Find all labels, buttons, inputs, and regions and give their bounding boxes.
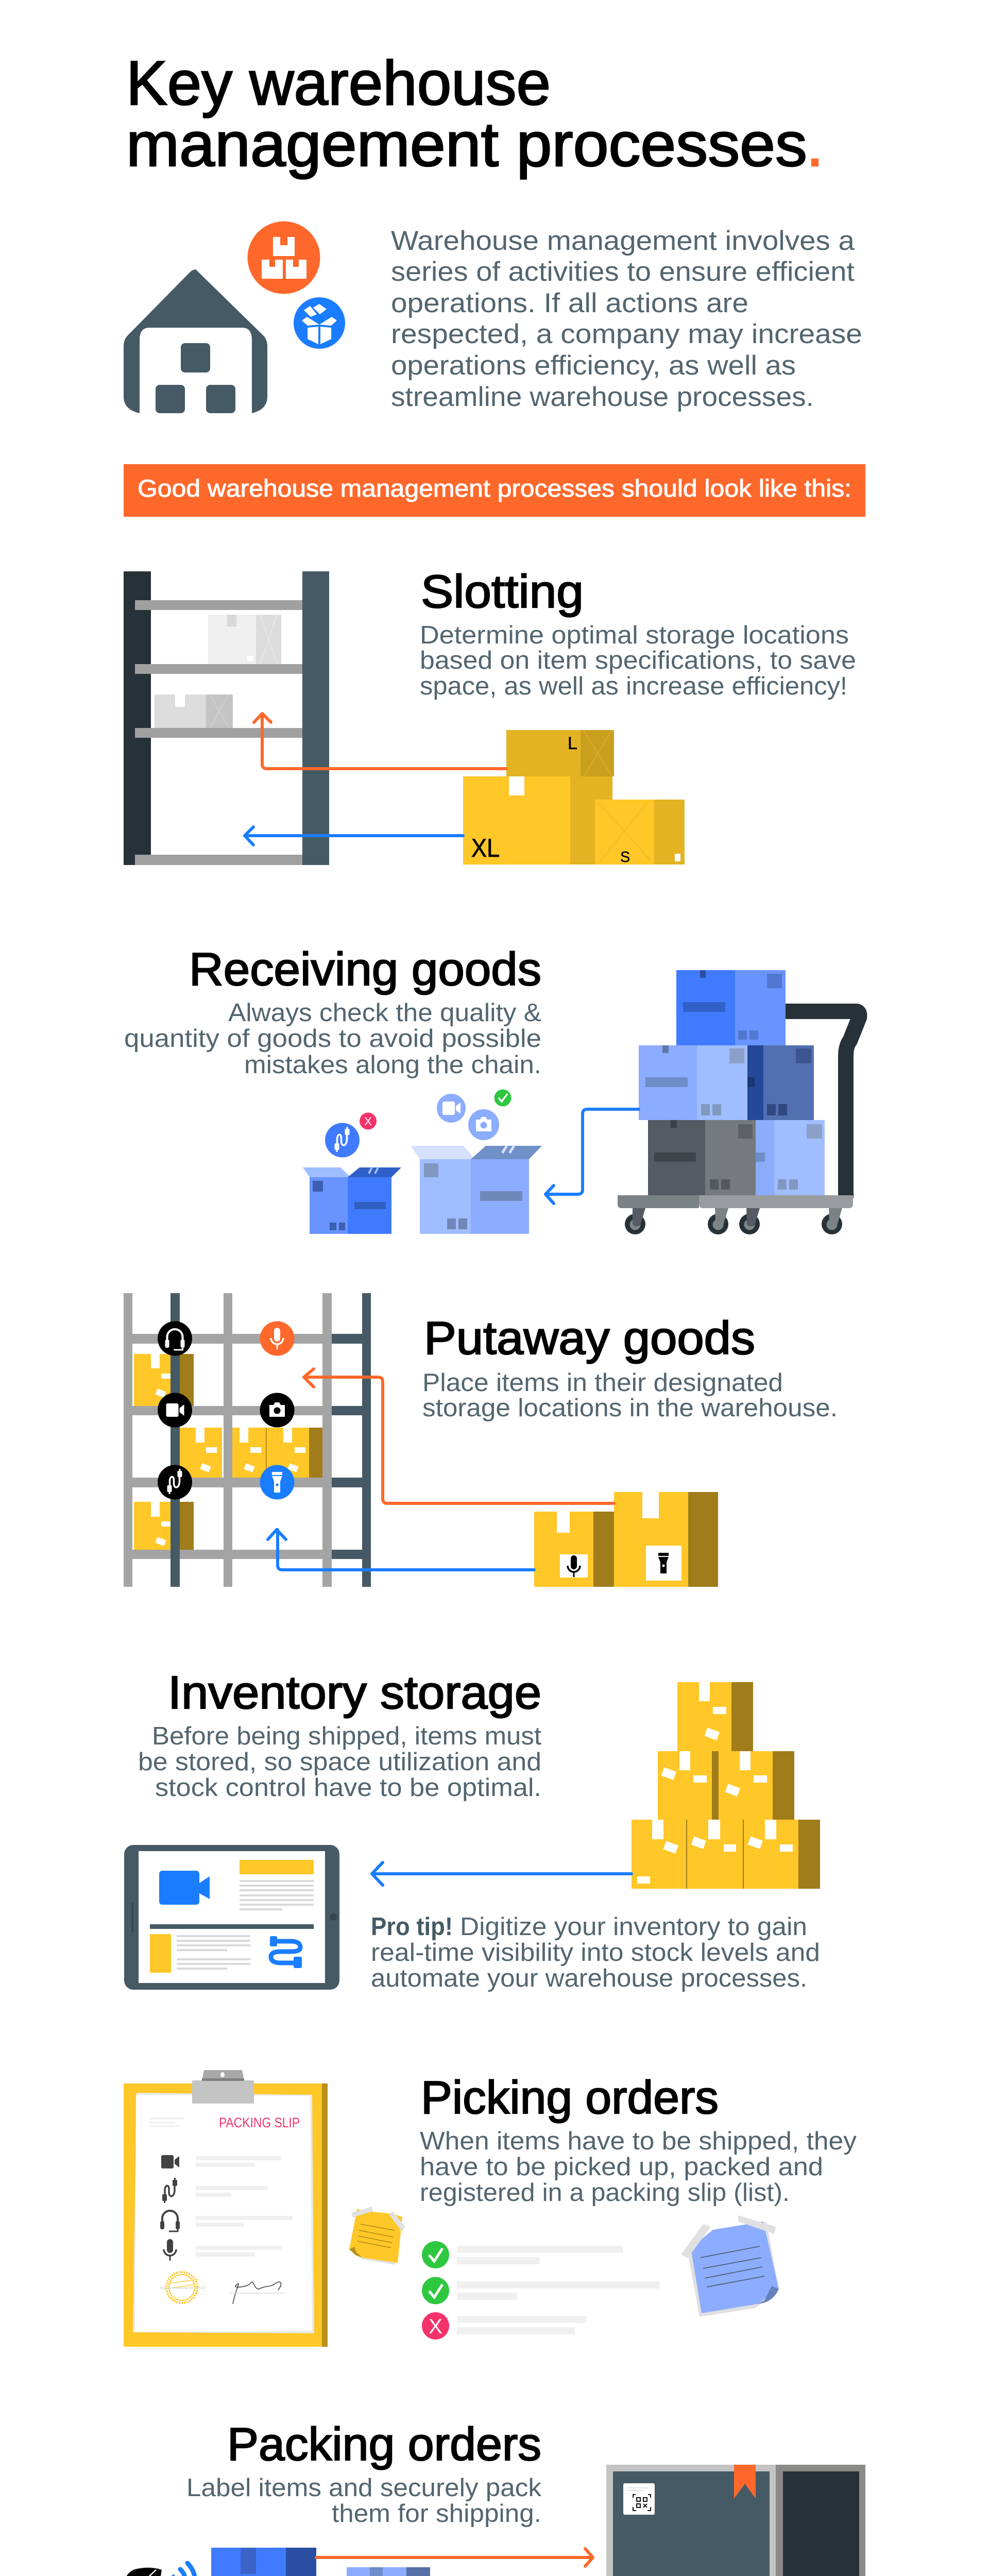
clipboard with packing slip: [124, 2070, 328, 2347]
list row: approved 1: [422, 2241, 623, 2268]
panel: packing orders: [126, 2419, 865, 2576]
cart handle: [786, 1011, 859, 1198]
icon: flashlight location: [260, 1465, 295, 1499]
yellow boxes L XL S: L: [568, 734, 577, 753]
bookmark tag: [734, 2465, 756, 2499]
icon: video badge: [437, 1094, 466, 1123]
arrow: blue to shelf: [245, 827, 463, 845]
icon: video on tablet: [159, 1871, 210, 1905]
warehouse rack: [124, 1293, 371, 1587]
yellow boxes L XL S: [463, 730, 685, 866]
banner: Good warehouse management processes should look like this:: [138, 474, 851, 502]
heading: inventory storage: Inventory storage: [168, 1667, 541, 1719]
description: slotting: space, as well as increase efficiency!: [420, 672, 847, 700]
shelved grey boxes: [155, 615, 281, 728]
arrow: orange to rack: [304, 1369, 614, 1503]
description: slotting: based on item specifications, to save: [420, 647, 856, 674]
description: slotting: [420, 621, 856, 700]
racked yellow boxes: [134, 1293, 322, 1587]
arrow: blue to rack: [268, 1530, 534, 1570]
description: inventory storage: be stored, so space utilization and: [138, 1748, 541, 1776]
heading: slotting: Slotting: [421, 566, 584, 618]
intro text: respected, a company may increase: [391, 319, 862, 349]
list row: approved 2: [422, 2277, 660, 2304]
signature: [229, 2282, 284, 2304]
icon: blue open box badge: [294, 297, 345, 349]
description: receiving goods: mistakes along the chain.: [244, 1051, 541, 1079]
panel: picking orders: [124, 2070, 857, 2347]
description: packing orders: them for shipping.: [332, 2500, 541, 2528]
icon: warehouse with box badges: [124, 222, 345, 413]
pro tip text: Pro tip!: [371, 1913, 453, 1941]
icon: connector rejected: [325, 1123, 360, 1157]
arrow: cart to open boxes: [545, 1109, 639, 1204]
icon: video location: [158, 1393, 192, 1427]
intro text: operations. If all actions are: [391, 288, 748, 318]
icon: microphone location: [260, 1321, 295, 1356]
list row: rejected: X: [429, 2315, 442, 2338]
intro text: series of activities to ensure efficient: [391, 257, 855, 287]
description: slotting: Determine optimal storage locations: [420, 621, 849, 649]
icon: connector row: [162, 2178, 177, 2203]
description: putaway goods: Place items in their designated: [422, 1369, 783, 1397]
boxes with labels: [534, 1492, 718, 1587]
description: packing orders: Label items and securely pack: [186, 2474, 542, 2502]
small blue box: [347, 2567, 430, 2576]
icon: approved check: [494, 1089, 511, 1107]
banner: [124, 464, 865, 517]
icon: headset row: [160, 2211, 180, 2231]
icon: video row: [161, 2155, 179, 2168]
heading: receiving goods: Receiving goods: [189, 944, 541, 995]
heading: putaway goods: Putaway goods: [424, 1313, 755, 1364]
panel: slotting: [124, 566, 856, 866]
panel: putaway goods: [124, 1293, 838, 1587]
description: receiving goods: Always check the quality &: [228, 999, 541, 1027]
sticky note: yellow: [349, 2207, 405, 2265]
icon: camera location: [260, 1393, 295, 1427]
description: inventory storage: Before being shipped, items must: [152, 1722, 541, 1750]
clip: [192, 2070, 254, 2104]
cart wheels: [625, 1208, 842, 1234]
title: Key warehouse: [126, 48, 551, 118]
arrow: big box to cart: [316, 2549, 593, 2566]
sticky note: blue: [681, 2215, 779, 2317]
description: receiving goods: quantity of goods to avoid possible: [124, 1025, 541, 1053]
panel: inventory storage: [124, 1667, 820, 1992]
panel: receiving goods: [124, 944, 859, 1234]
large blue box: [211, 2548, 316, 2576]
icon: barcode scanner: [126, 2563, 195, 2576]
lower boxes: [648, 1120, 825, 1195]
intro text: [391, 226, 862, 412]
yellow boxes L XL S: S: [620, 849, 630, 866]
stacked yellow boxes: [632, 1682, 820, 1889]
open blue box: [303, 1167, 401, 1234]
pro tip text: automate your warehouse processes.: [371, 1964, 807, 1992]
description: packing orders: [186, 2474, 542, 2528]
icon: warehouse building: [124, 269, 267, 413]
intro text: Warehouse management involves a: [391, 226, 855, 256]
pro tip text: Digitize your inventory to gain: [460, 1913, 807, 1941]
description: receiving goods: [124, 999, 541, 1079]
yellow boxes L XL S: XL: [471, 834, 500, 862]
icon: connector on tablet: [270, 1936, 302, 1968]
list row: rejected: [422, 2312, 586, 2340]
pro tip text: real-time visibility into stock levels and: [371, 1939, 820, 1967]
shelf rack: [124, 571, 329, 865]
clipboard with packing slip: PACKING SLIP: [219, 2115, 300, 2130]
cart base: [618, 1195, 853, 1208]
arrow: orange to shelf: [254, 714, 506, 769]
roll cage cart: [606, 2465, 865, 2576]
description: inventory storage: stock control have to be optimal.: [155, 1774, 541, 1802]
pro tip text: [371, 1913, 820, 1992]
description: picking orders: have to be picked up, packed and: [420, 2153, 823, 2181]
icon: microphone row: [164, 2239, 176, 2261]
description: putaway goods: [422, 1369, 838, 1422]
description: picking orders: registered in a packing slip (list).: [420, 2179, 790, 2207]
cart with stacked boxes: [618, 970, 859, 1234]
open light blue box: [411, 1146, 542, 1234]
description: picking orders: When items have to be shipped, they: [420, 2127, 857, 2155]
icon: camera badge: [468, 1109, 499, 1140]
icon: connector location: [158, 1465, 192, 1499]
check list: [422, 2241, 660, 2340]
shipping label: [623, 2483, 655, 2515]
description: inventory storage: [138, 1722, 541, 1802]
intro text: streamline warehouse processes.: [391, 382, 814, 412]
stamp: [160, 2272, 206, 2303]
top blue box: [676, 970, 786, 1045]
description: picking orders: [420, 2127, 857, 2207]
tablet: [124, 1845, 339, 1990]
icon: rejected mark: [360, 1113, 377, 1129]
description: putaway goods: storage locations in the warehouse.: [422, 1394, 838, 1422]
heading: packing orders: Packing orders: [227, 2419, 541, 2470]
heading: picking orders: Picking orders: [421, 2072, 719, 2124]
icon: headset location: [158, 1321, 192, 1356]
title: .: [806, 109, 824, 179]
arrow: boxes to tablet: [372, 1862, 632, 1885]
icon: orange boxes badge: [247, 222, 320, 294]
intro text: operations efficiency, as well as: [391, 350, 796, 381]
title: management processes: [126, 109, 807, 179]
title: [126, 48, 824, 179]
middle boxes: [639, 1045, 814, 1120]
icon: rejected mark: X: [364, 1115, 372, 1128]
